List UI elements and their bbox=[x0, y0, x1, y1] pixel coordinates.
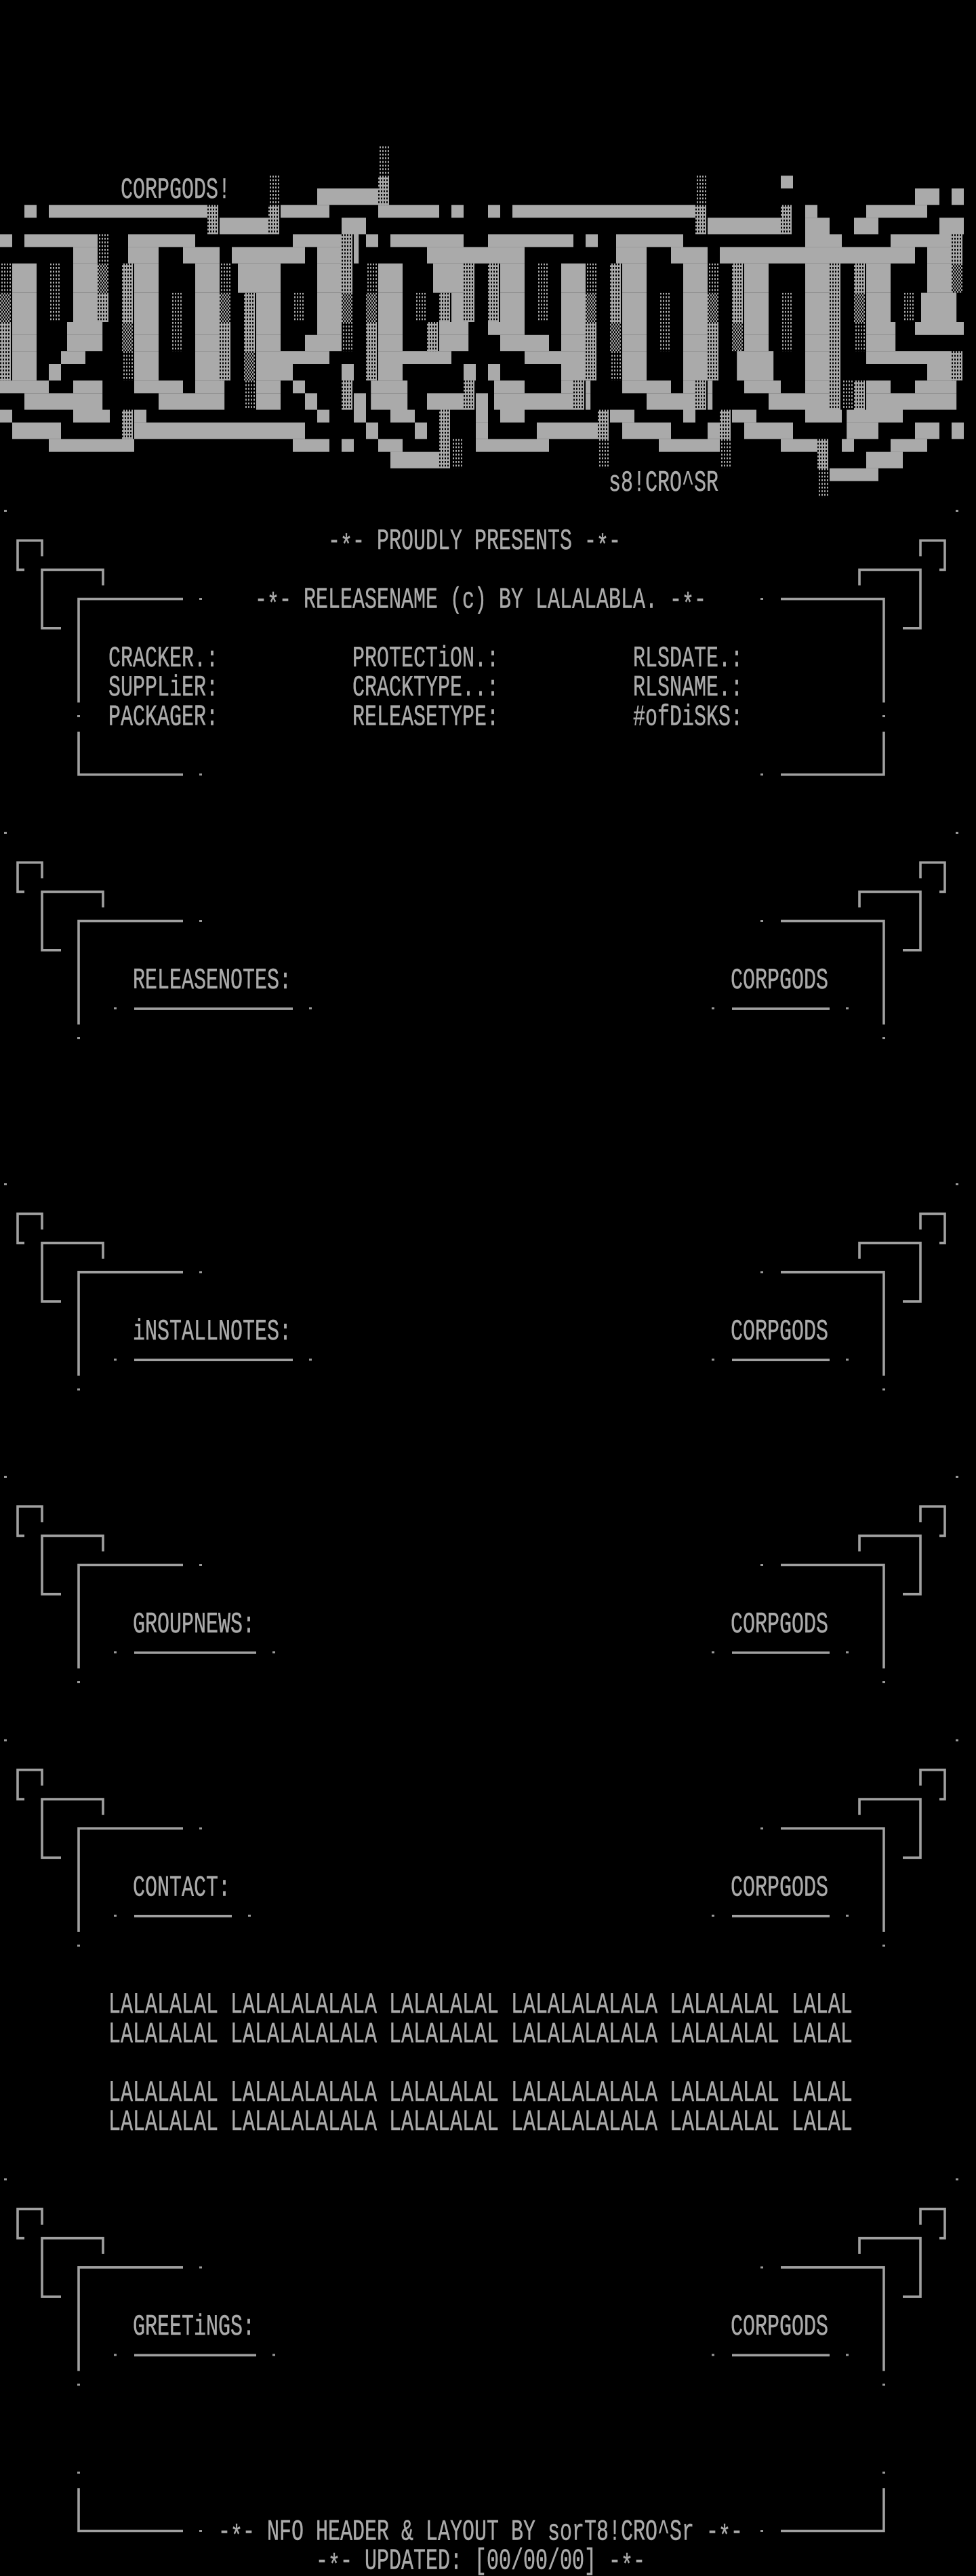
heading: release name: - bbox=[694, 584, 706, 618]
heading: release name: - bbox=[279, 584, 291, 618]
underlines bbox=[114, 2354, 849, 2356]
footer credit: NFO HEADER & LAYOUT BY sorT8!CRO^Sr - bbox=[267, 2516, 718, 2550]
text block: contact body: LALALALAL LALALALALALA LALALALAL LALALALALALA LALALALAL LALAL bbox=[108, 2077, 853, 2110]
footer credit: - bbox=[731, 2516, 743, 2550]
logo shading strips bbox=[0, 146, 962, 498]
info column: credits: CRACKER.: bbox=[108, 643, 218, 676]
info column: release: #ofDiSKS: bbox=[633, 701, 743, 734]
panel: contact bbox=[4, 1739, 958, 1947]
bracket frame: install notes bbox=[4, 1183, 958, 1390]
underlines bbox=[114, 1007, 849, 1009]
panel: install notes bbox=[4, 1183, 958, 1390]
panel: footer bbox=[77, 2472, 885, 2576]
heading: release name: * bbox=[682, 590, 694, 623]
underlines bbox=[114, 1359, 849, 1361]
info column: protection bbox=[352, 643, 499, 734]
bracket frame: contact bbox=[4, 1739, 958, 1947]
bracket frame: release notes bbox=[4, 832, 958, 1039]
heading: proudly presents: - bbox=[328, 525, 340, 559]
heading: proudly presents: - bbox=[352, 525, 365, 559]
logo: corpgods block lettering bbox=[0, 146, 964, 498]
bracket frame: group news bbox=[4, 1476, 958, 1683]
heading: installnotes: iNSTALLNOTES: bbox=[133, 1316, 291, 1349]
logo shading: dense strips bbox=[0, 176, 962, 468]
footer credit: * bbox=[718, 2521, 731, 2555]
underlines bbox=[114, 1915, 849, 1917]
info column: protection: PROTECTiON.: bbox=[352, 643, 499, 676]
footer credit: - bbox=[218, 2516, 230, 2550]
bracket frame: greetings bbox=[4, 2178, 958, 2386]
bracket frame: footer bbox=[77, 2472, 885, 2532]
label: corpgods: CORPGODS bbox=[731, 1609, 828, 1642]
logo shading: light dotted strips bbox=[0, 146, 914, 498]
info column: release: RLSNAME.: bbox=[633, 672, 743, 705]
heading: proudly presents: * bbox=[340, 531, 352, 564]
footer credit: - bbox=[243, 2516, 255, 2550]
info column: credits: PACKAGER: bbox=[108, 701, 218, 734]
panel: release notes bbox=[4, 832, 958, 1039]
label: corpgods: CORPGODS bbox=[731, 1316, 828, 1349]
label: corpgods: CORPGODS bbox=[731, 1872, 828, 1906]
text block: contact body: LALALALAL LALALALALALA LALALALAL LALALALALALA LALALALAL LALAL bbox=[108, 2106, 853, 2139]
heading: releasenotes: RELEASENOTES: bbox=[133, 965, 291, 998]
heading: proudly presents: - bbox=[609, 525, 621, 559]
bracket frame: release info bbox=[4, 510, 958, 776]
logo shading: medium checker strips bbox=[0, 264, 962, 380]
text block: contact body bbox=[108, 1989, 853, 2139]
panel: group news bbox=[4, 1476, 958, 1683]
heading: groupnews: GROUPNEWS: bbox=[133, 1609, 255, 1642]
heading: greetings: GREETiNGS: bbox=[133, 2311, 255, 2344]
label: corpgods: CORPGODS bbox=[731, 965, 828, 998]
logo tag: CORPGODS!: CORPGODS! bbox=[121, 174, 230, 207]
info column: credits: SUPPLiER: bbox=[108, 672, 218, 705]
info column: release: RLSDATE.: bbox=[633, 643, 743, 676]
underlines bbox=[114, 1651, 849, 1653]
info column: credits bbox=[108, 643, 218, 734]
heading: proudly presents: PROUDLY PRESENTS - bbox=[377, 525, 596, 559]
heading: proudly presents: * bbox=[596, 531, 609, 564]
text block: contact body: LALALALAL LALALALALALA LALALALAL LALALALALALA LALALALAL LALAL bbox=[108, 1989, 853, 2022]
heading: release name: - bbox=[255, 584, 267, 618]
heading: release name: RELEASENAME (c) BY LALALABLA. - bbox=[304, 584, 682, 618]
heading: release name: * bbox=[267, 590, 279, 623]
logo credit: s8!CRO^SR: s8!CRO^SR bbox=[609, 467, 718, 500]
panel: release info bbox=[4, 510, 958, 776]
heading: contact: CONTACT: bbox=[133, 1872, 230, 1906]
text block: contact body: LALALALAL LALALALALALA LALALALAL LALALALALALA LALALALAL LALAL bbox=[108, 2018, 853, 2051]
label: corpgods: CORPGODS bbox=[731, 2311, 828, 2344]
info column: protection: RELEASETYPE: bbox=[352, 701, 499, 734]
footer credit: * bbox=[230, 2521, 243, 2555]
panel: greetings bbox=[4, 2178, 958, 2386]
info column: release bbox=[633, 643, 743, 734]
info column: protection: CRACKTYPE..: bbox=[352, 672, 499, 705]
